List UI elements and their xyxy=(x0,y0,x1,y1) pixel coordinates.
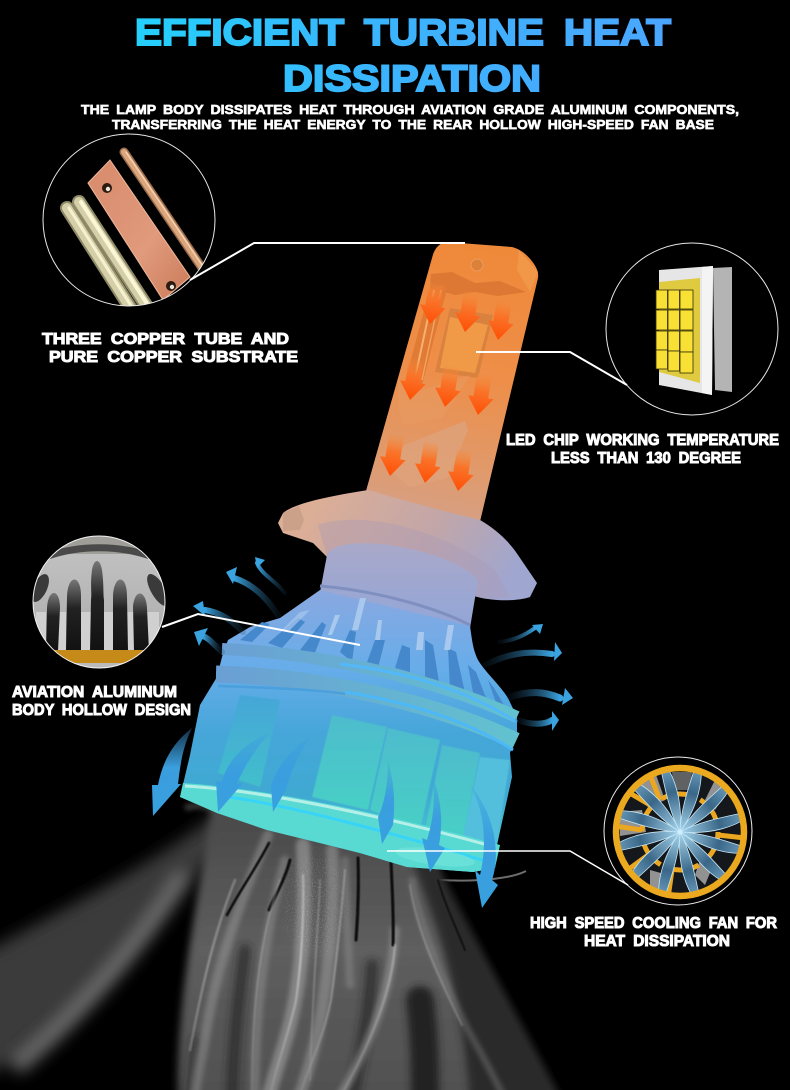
fan grey patches xyxy=(620,772,721,889)
side vents xyxy=(34,574,49,602)
label: aluminum body: AVIATION ALUMINUM xyxy=(12,684,177,701)
title xyxy=(135,12,671,99)
fine dark gaps xyxy=(227,843,465,950)
subtitle text: THE LAMP BODY DISSIPATES HEAT THROUGH AVIATION GRADE ALUMINUM COMPONENTS, xyxy=(81,102,739,117)
speckle dust xyxy=(280,850,349,960)
central smoke mass xyxy=(178,800,482,1090)
right faded smoke xyxy=(410,850,562,1090)
label: aluminum body xyxy=(12,684,191,719)
blue airflow arrows left xyxy=(193,557,285,652)
lower recess xyxy=(398,375,470,425)
screw xyxy=(471,259,483,271)
blue airflow arrows right xyxy=(485,624,573,731)
title: DISSIPATION xyxy=(283,58,541,99)
label: copper tube: THREE COPPER TUBE AND xyxy=(42,331,289,348)
top band xyxy=(62,536,136,554)
left recess xyxy=(405,285,448,385)
fin highlights xyxy=(282,598,454,650)
subtitle text xyxy=(81,102,739,132)
chip xyxy=(440,317,488,373)
body rings xyxy=(216,649,517,750)
chip back plate xyxy=(713,267,732,392)
swirl under fan xyxy=(185,806,526,881)
callout: cooling fan inset xyxy=(602,754,758,910)
bright streaks xyxy=(190,870,462,1090)
subtitle text: TRANSFERRING THE HEAT ENERGY TO THE REAR HOLLOW HIGH-SPEED FAN BASE xyxy=(112,117,714,132)
fan housing body xyxy=(180,590,517,872)
chip yellow pad xyxy=(659,278,700,383)
label: LED chip xyxy=(506,432,779,467)
fan gold ring xyxy=(616,768,744,896)
left wisp xyxy=(0,815,235,1080)
chip cells xyxy=(656,290,693,373)
label: cooling fan xyxy=(530,915,777,950)
bottom lip of fan xyxy=(180,783,500,872)
soft smoke streaks xyxy=(195,835,505,1090)
shroud panels xyxy=(218,695,510,843)
orange heat arrows xyxy=(377,281,517,493)
smoke airflow xyxy=(0,800,562,1090)
label: copper tube: PURE COPPER SUBSTRATE xyxy=(49,349,298,366)
collar disc xyxy=(278,490,537,600)
fan gold spokes xyxy=(615,770,745,898)
dark slots xyxy=(46,561,149,651)
title: EFFICIENT TURBINE HEAT xyxy=(135,12,671,53)
dark channels in smoke xyxy=(190,950,425,1090)
leader lines xyxy=(162,243,628,885)
white fin bars xyxy=(36,612,159,652)
label: copper tube xyxy=(42,331,298,366)
orange band xyxy=(54,650,144,663)
copper tubes xyxy=(67,152,204,320)
chip recess xyxy=(435,308,493,378)
arm top facet xyxy=(517,250,538,292)
label: aluminum body: BODY HOLLOW DESIGN xyxy=(12,702,191,719)
blue airflow arrows down xyxy=(152,728,498,908)
chip white substrate xyxy=(659,266,713,395)
callout: aluminum body inset xyxy=(32,536,166,668)
callout: LED chip inset xyxy=(606,243,778,415)
callout: copper tubes inset xyxy=(43,134,215,320)
neck xyxy=(320,543,478,628)
arm notch xyxy=(430,272,526,296)
fin slots xyxy=(240,618,508,712)
fan blades xyxy=(614,766,746,898)
label: cooling fan: HEAT DISSIPATION xyxy=(584,933,730,950)
LED bulb xyxy=(180,242,538,872)
arm xyxy=(362,242,538,530)
label: LED chip: LESS THAN 130 DEGREE xyxy=(551,450,741,467)
